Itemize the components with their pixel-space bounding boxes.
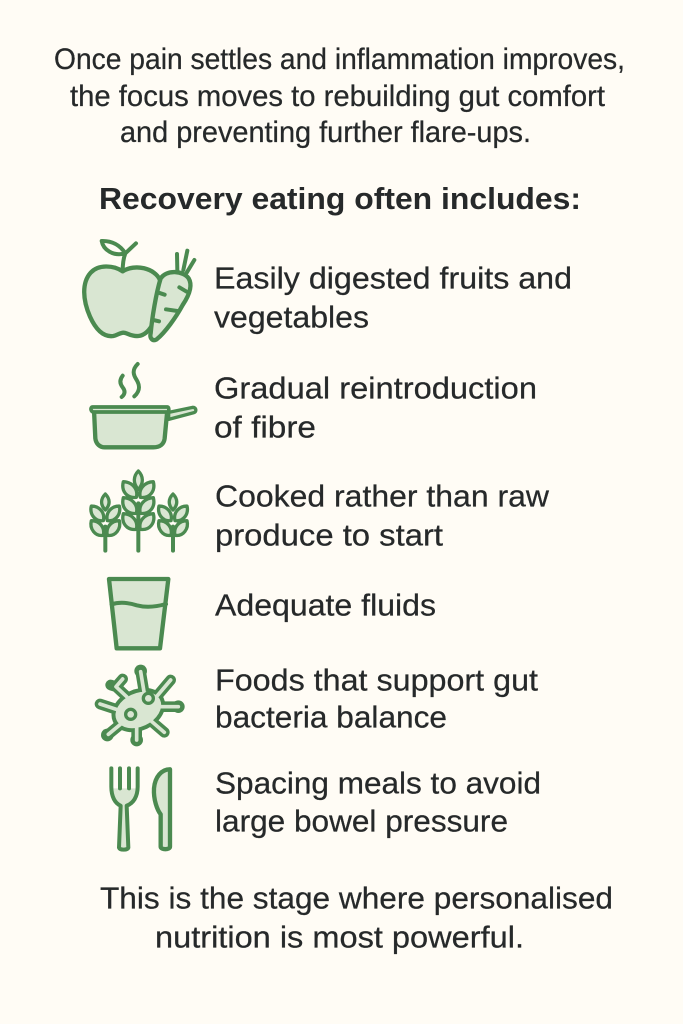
icon: apple and carrot bbox=[84, 241, 194, 340]
closing text: This is the stage where personalised bbox=[100, 880, 613, 916]
item text: reintroduction of fibre: Gradual reintroduction bbox=[214, 370, 537, 406]
item text: spacing meals: Spacing meals to avoid bbox=[215, 766, 541, 800]
heading: Recovery eating often includes: bbox=[99, 181, 581, 216]
icon: steaming pan bbox=[91, 364, 196, 447]
item text: cooked produce: Cooked rather than raw bbox=[215, 478, 550, 514]
closing text: nutrition is most powerful. bbox=[155, 920, 524, 954]
item text: gut bacteria bbox=[215, 662, 538, 734]
item text: reintroduction of fibre: of fibre bbox=[214, 410, 316, 444]
item text: gut bacteria: Foods that support gut bbox=[215, 662, 538, 698]
icon: glass of water bbox=[109, 579, 168, 648]
item text: spacing meals: large bowel pressure bbox=[215, 804, 508, 838]
intro text: Once pain settles and inflammation improves, bbox=[54, 43, 625, 76]
item text: fruits and vegetables: vegetables bbox=[214, 300, 369, 334]
item text: cooked produce bbox=[215, 478, 550, 552]
item text: spacing meals bbox=[215, 766, 541, 838]
icon: wheat stalks bbox=[91, 471, 187, 551]
item text: fluids: Adequate fluids bbox=[215, 588, 436, 622]
intro text: and preventing further flare-ups. bbox=[120, 116, 531, 149]
icon: fork and knife bbox=[111, 768, 170, 850]
intro text: the focus moves to rebuilding gut comfort bbox=[70, 80, 605, 113]
intro text bbox=[54, 43, 625, 149]
item text: gut bacteria: bacteria balance bbox=[215, 700, 447, 734]
item text: fruits and vegetables bbox=[214, 260, 572, 334]
icon: gut bacterium bbox=[100, 665, 185, 746]
item text: cooked produce: produce to start bbox=[215, 518, 443, 552]
item text: reintroduction of fibre bbox=[214, 370, 537, 444]
closing text bbox=[100, 880, 613, 954]
item text: fruits and vegetables: Easily digested fruits and bbox=[214, 260, 572, 296]
